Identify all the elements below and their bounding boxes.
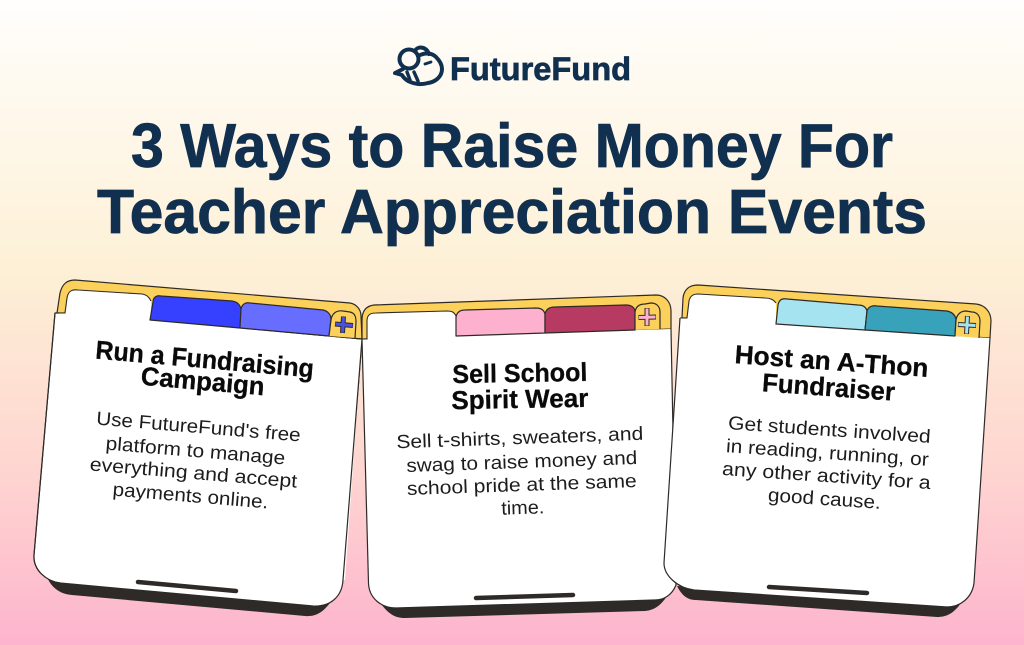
panel: card 1, fundraising campaign	[34, 280, 362, 616]
title: 3 Ways to Raise Money For	[131, 112, 893, 181]
icon: plus tab	[955, 311, 980, 338]
card body text: any other activity for a	[721, 459, 932, 494]
icon: bee	[395, 48, 442, 84]
card body text: in reading, running, or	[725, 436, 930, 471]
card heading: Spirit Wear	[451, 383, 589, 415]
card body text	[721, 413, 932, 514]
panel: card 3, a-thon fundraiser	[664, 285, 991, 617]
tab: teal	[865, 306, 956, 336]
card body text: platform to manage	[105, 434, 286, 469]
card body text: everything and accept	[89, 454, 299, 493]
card body text: swag to raise money and	[406, 448, 638, 477]
panel: card 2, school spirit wear	[362, 295, 676, 618]
card heading: Campaign	[140, 361, 266, 401]
card heading: Sell School	[452, 357, 588, 389]
card body text: Sell t-shirts, sweaters, and	[396, 424, 644, 453]
logo wordmark: FutureFund	[450, 51, 631, 87]
card body text: payments online.	[112, 480, 269, 513]
card body text	[396, 424, 644, 520]
card heading	[451, 357, 589, 415]
card shadow	[46, 575, 332, 616]
card tab bar	[362, 295, 671, 339]
card inner sheet	[56, 290, 362, 580]
title: Teacher Appreciation Events	[97, 178, 927, 247]
card shadow	[677, 586, 961, 617]
card heading	[734, 339, 929, 407]
card handle	[476, 595, 573, 598]
icon: plus tab	[635, 303, 660, 330]
icon: plus tab	[329, 311, 356, 338]
card body	[362, 311, 676, 608]
title	[97, 112, 927, 247]
tab: blue	[150, 296, 241, 328]
tab: pink	[456, 308, 545, 336]
card handle	[138, 582, 236, 591]
tab: sky	[776, 299, 867, 330]
card body text: Get students involved	[727, 413, 931, 448]
card shadow	[381, 596, 667, 618]
card tab bar	[682, 285, 991, 338]
card body text: time.	[501, 497, 545, 520]
card handle	[769, 587, 867, 593]
card body text: school pride at the same	[407, 471, 637, 500]
card body	[34, 313, 362, 606]
card body	[664, 294, 990, 607]
card heading: Fundraiser	[761, 367, 896, 407]
card heading: Run a Fundraising	[94, 335, 315, 384]
card body text	[89, 409, 301, 513]
card heading: Host an A-Thon	[734, 339, 929, 383]
logo: FutureFund	[395, 48, 631, 87]
tab: light blue	[240, 303, 331, 336]
card tab bar	[57, 280, 362, 339]
tab: crimson	[545, 305, 635, 333]
card body text: good cause.	[767, 485, 881, 514]
card body text: Use FutureFund's free	[95, 409, 301, 446]
